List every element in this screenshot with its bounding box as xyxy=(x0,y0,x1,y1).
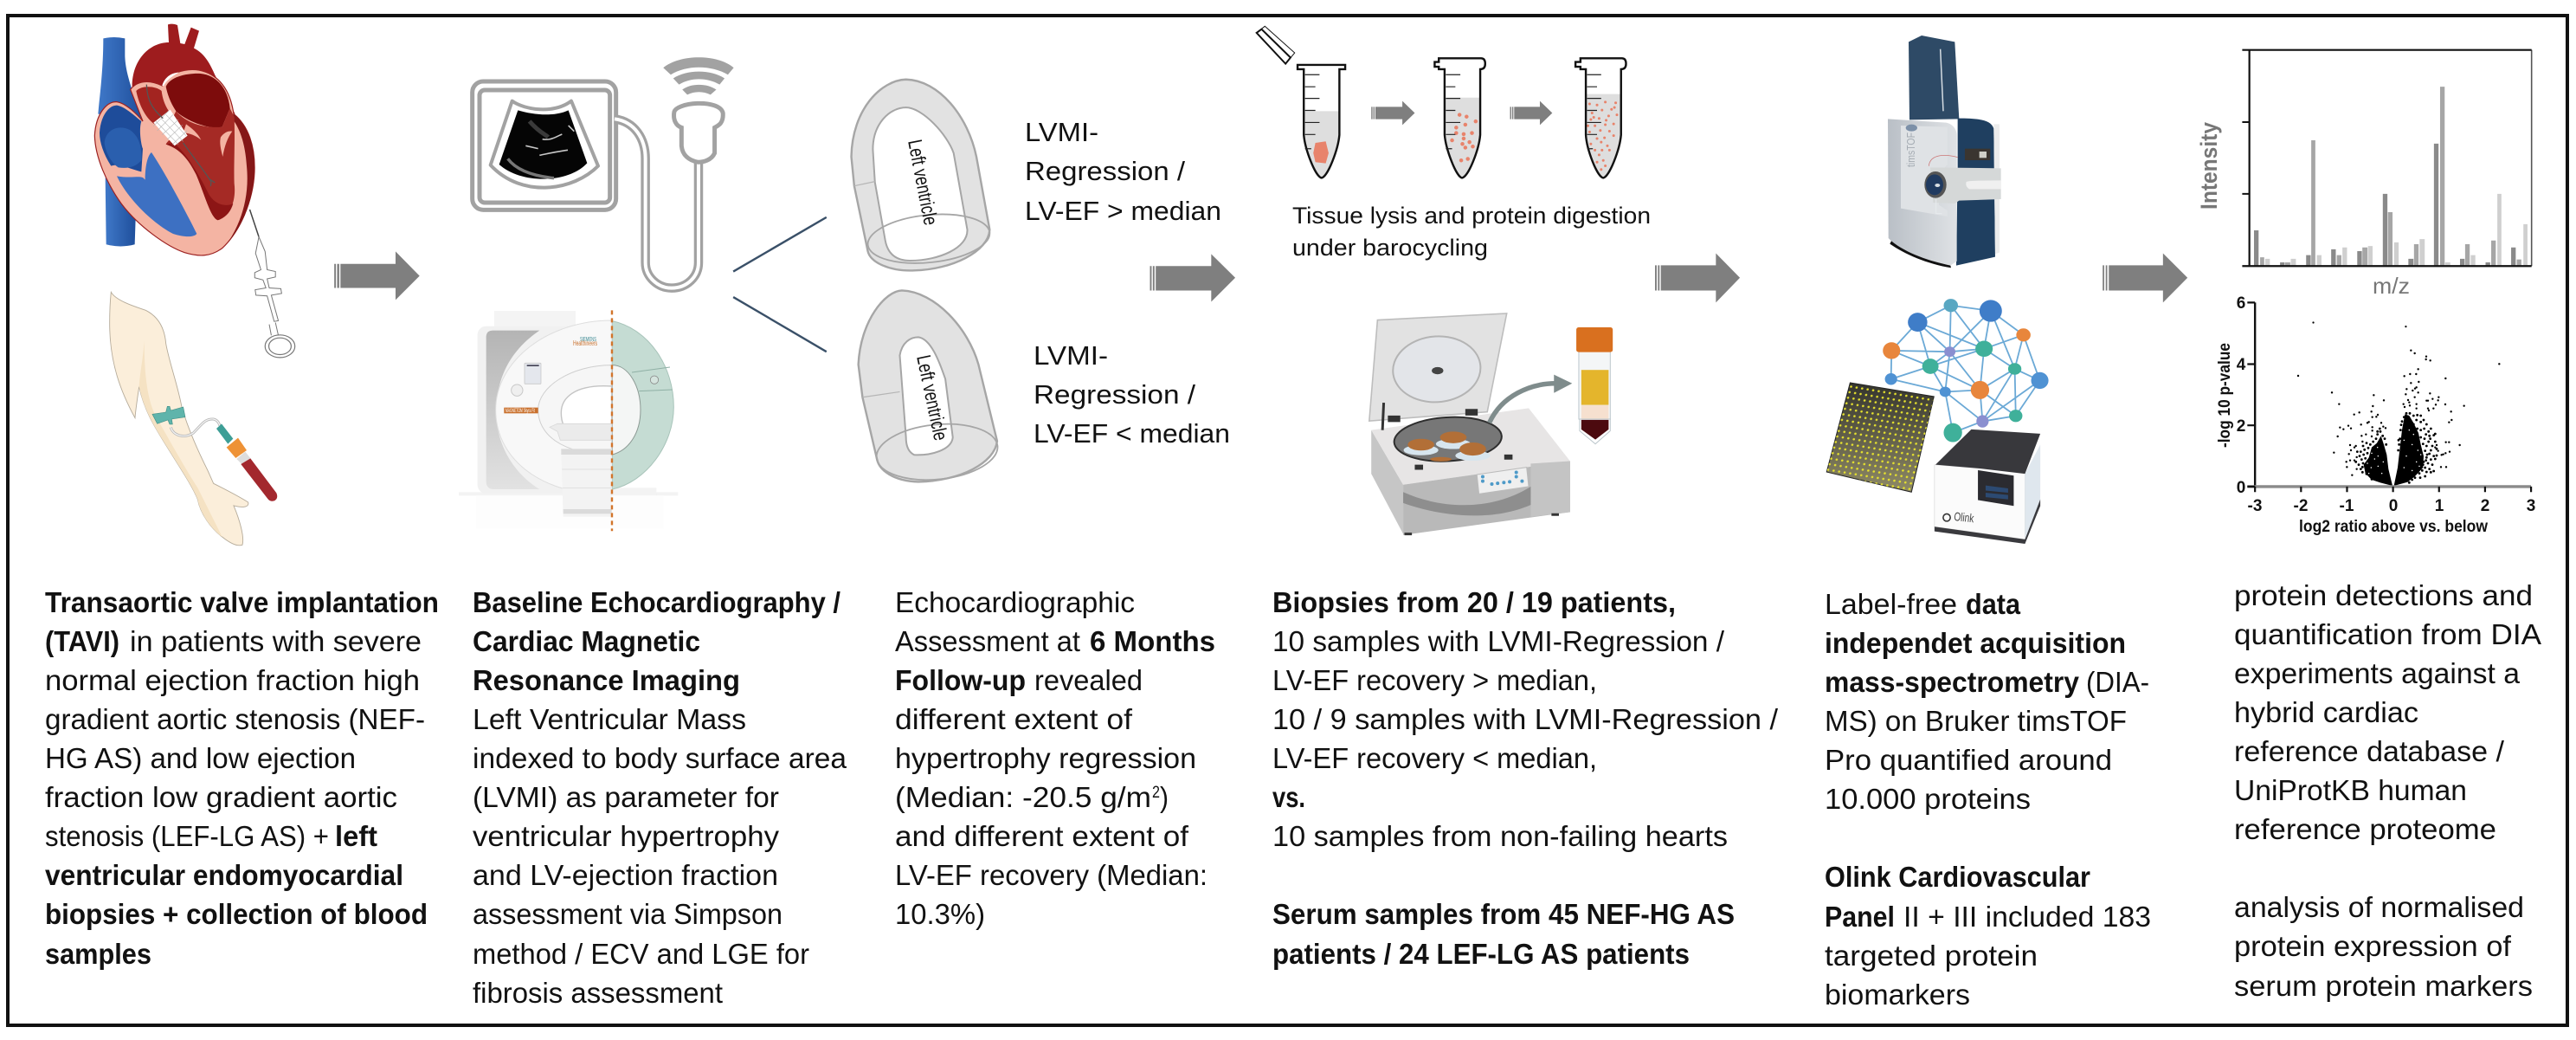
text block: follow-up: ) xyxy=(1160,781,1169,813)
icon: heart with valve implant xyxy=(94,24,254,255)
text block: mass spectrometry and Olink xyxy=(1825,588,2151,1011)
label: LVMI regression above median: Regression / xyxy=(1025,156,1185,186)
text block: TAVI: Transaortic valve implantation xyxy=(45,586,439,618)
label: LVMI regression above median: LV-EF > median xyxy=(1025,196,1221,226)
text block: mass spectrometry and Olink: Panel xyxy=(1825,901,1895,933)
icon: left ventricle, more regression xyxy=(852,80,993,270)
label: left ventricle lower: Left ventricle xyxy=(912,353,952,442)
text block: TAVI: stenosis (LEF-LG AS) + xyxy=(45,820,329,852)
text block: baseline imaging: and LV-ejection fraction xyxy=(473,859,778,891)
x tick labels xyxy=(2248,497,2535,515)
text block: samples: 10 samples from non-failing hearts xyxy=(1272,820,1728,852)
icon: tissue lysis tubes xyxy=(1257,26,1626,178)
icon: left ventricle, less regression xyxy=(859,290,1001,486)
text block: baseline imaging: Cardiac Magnetic xyxy=(473,625,700,657)
text block: data analysis: protein detections and xyxy=(2234,579,2533,611)
axis label: m/z: m/z xyxy=(2373,273,2410,299)
icon: ultrasound probe xyxy=(663,57,734,162)
text block: follow-up: Assessment at xyxy=(895,625,1080,657)
text block: data analysis: serum protein markers xyxy=(2234,970,2533,1002)
label: tissue lysis xyxy=(1292,203,1651,261)
x tick labels: 3 xyxy=(2527,497,2535,515)
text block: follow-up: 10.3%) xyxy=(895,898,985,930)
text block: mass spectrometry and Olink: mass-spectrometry xyxy=(1825,666,2080,698)
text block: follow-up: different extent of xyxy=(895,703,1133,735)
x axis label: log2 ratio above vs. below xyxy=(2299,518,2488,536)
text block: mass spectrometry and Olink: Olink Cardiovascular xyxy=(1825,861,2090,893)
label: LVMI regression below median xyxy=(1034,340,1230,449)
icon: echocardiography device xyxy=(473,81,699,288)
text block: baseline imaging: Left Ventricular Mass xyxy=(473,703,746,735)
text block: mass spectrometry and Olink: Pro quantified around xyxy=(1825,744,2112,776)
label: Olink: Olink xyxy=(1954,509,1975,525)
text block: data analysis: quantification from DIA xyxy=(2234,618,2541,650)
label: MRI brand: SIEMENS xyxy=(580,337,596,343)
text block: TAVI: in patients with severe xyxy=(130,625,422,657)
text block: samples: patients / 24 LEF-LG AS patients xyxy=(1272,938,1690,970)
text block: data analysis xyxy=(2234,579,2541,1002)
text block: mass spectrometry and Olink: 10.000 proteins xyxy=(1825,783,2031,815)
text block: data analysis: analysis of normalised xyxy=(2234,891,2524,923)
text block: baseline imaging: method / ECV and LGE for xyxy=(473,938,809,970)
text block: TAVI: gradient aortic stenosis (NEF- xyxy=(45,703,425,735)
text block: mass spectrometry and Olink: II + III included 183 xyxy=(1903,901,2151,933)
label: LVMI regression below median: Regression / xyxy=(1034,379,1195,410)
text block: follow-up: 6 Months xyxy=(1090,625,1215,657)
text block: TAVI xyxy=(45,586,439,970)
chart: volcano plot xyxy=(2216,294,2535,536)
text block: TAVI: fraction low gradient aortic xyxy=(45,781,397,813)
branching lines to left ventricle groups xyxy=(733,217,827,352)
text block: follow-up: (Median: -20.5 g/m xyxy=(895,781,1151,813)
text block: baseline imaging: Resonance Imaging xyxy=(473,664,740,696)
text block: data analysis: reference database / xyxy=(2234,735,2505,767)
label: MRI brand: MAGNETOM Skyra Fit xyxy=(506,409,535,414)
text block: baseline imaging: ventricular hypertrophy xyxy=(473,820,780,852)
text block: follow-up: revealed xyxy=(1034,664,1143,696)
text block: baseline imaging: Baseline Echocardiography / xyxy=(473,586,840,618)
text block: data analysis: reference proteome xyxy=(2234,813,2496,845)
label: timsTOF: timsTOF xyxy=(1904,132,1917,167)
text block: samples: LV-EF recovery < median, xyxy=(1272,742,1597,774)
text block: mass spectrometry and Olink: targeted protein xyxy=(1825,940,2038,972)
y tick labels xyxy=(2237,294,2246,497)
x tick labels: -1 xyxy=(2340,497,2354,515)
text block: TAVI: samples xyxy=(45,938,151,970)
text block: baseline imaging xyxy=(473,586,847,1009)
icon: protein network xyxy=(1883,299,2049,442)
text block: mass spectrometry and Olink: data xyxy=(1966,588,2021,620)
text block: data analysis: UniProtKB human xyxy=(2234,774,2467,806)
icon: Olink instrument xyxy=(1935,430,2040,544)
y axis label: -log 10 p-value xyxy=(2216,343,2234,448)
text block: TAVI: normal ejection fraction high xyxy=(45,664,420,696)
text block: TAVI: HG AS) and low ejection xyxy=(45,742,356,774)
label: MRI brand: Healthineers xyxy=(573,339,597,347)
label: MRI brand xyxy=(506,337,597,414)
text block: follow-up: Echocardiographic xyxy=(895,586,1135,618)
axis label: Intensity: Intensity xyxy=(2196,122,2222,210)
text block: samples: vs. xyxy=(1272,781,1305,813)
text block: TAVI: biopsies + collection of blood xyxy=(45,898,428,930)
text block: follow-up: LV-EF recovery (Median: xyxy=(895,859,1208,891)
text block: samples: LV-EF recovery > median, xyxy=(1272,664,1597,696)
label: tissue lysis: under barocycling xyxy=(1292,235,1488,261)
x tick labels: -2 xyxy=(2294,497,2308,515)
text block: data analysis: hybrid cardiac xyxy=(2234,696,2418,728)
x tick labels: 2 xyxy=(2481,497,2489,515)
text block: mass spectrometry and Olink: independet acquisition xyxy=(1825,627,2126,659)
text block: baseline imaging: (LVMI) as parameter for xyxy=(473,781,779,813)
label: LVMI regression above median: LVMI- xyxy=(1025,117,1098,147)
text block: TAVI: left xyxy=(335,820,377,852)
text block: mass spectrometry and Olink: Label-free xyxy=(1825,588,1957,620)
arrow 3 xyxy=(1655,254,1740,302)
icon: centrifuge and serum tube xyxy=(1369,313,1613,535)
text block: follow-up: Follow-up xyxy=(895,664,1026,696)
y tick labels: 4 xyxy=(2237,356,2246,374)
text block: samples xyxy=(1272,586,1779,970)
text block: mass spectrometry and Olink: MS) on Bruker timsTOF xyxy=(1825,705,2127,737)
icon: timsTOF mass spectrometer xyxy=(1888,36,2001,268)
text block: mass spectrometry and Olink: (DIA- xyxy=(2086,666,2149,698)
text block: follow-up xyxy=(895,586,1215,930)
text block: follow-up: 2 xyxy=(1152,784,1160,802)
text block: follow-up: and different extent of xyxy=(895,820,1189,852)
text block: samples: Biopsies from 20 / 19 patients, xyxy=(1272,586,1676,618)
text block: follow-up: hypertrophy regression xyxy=(895,742,1196,774)
text block: data analysis: experiments against a xyxy=(2234,657,2521,689)
icon: MRI scanner xyxy=(459,310,678,531)
arrow 1 xyxy=(334,251,420,300)
x tick labels: 1 xyxy=(2435,497,2444,515)
label: tissue lysis: Tissue lysis and protein digestion xyxy=(1292,203,1651,229)
y tick labels: 2 xyxy=(2237,417,2245,436)
text block: samples: 10 samples with LVMI-Regression / xyxy=(1272,625,1725,657)
x tick labels: -3 xyxy=(2248,497,2262,515)
text block: baseline imaging: fibrosis assessment xyxy=(473,977,723,1009)
icon: bioptome xyxy=(250,210,295,358)
text block: samples: 10 / 9 samples with LVMI-Regression / xyxy=(1272,703,1779,735)
label: left ventricle upper: Left ventricle xyxy=(904,138,943,227)
text block: data analysis: protein expression of xyxy=(2234,930,2512,962)
text block: mass spectrometry and Olink: biomarkers xyxy=(1825,979,1970,1011)
chart: mass spectrum bars xyxy=(2242,50,2532,266)
x tick labels: 0 xyxy=(2389,497,2398,515)
y tick labels: 6 xyxy=(2237,294,2245,313)
arrow 4 xyxy=(2103,254,2187,302)
text block: baseline imaging: indexed to body surface area xyxy=(473,742,847,774)
label: LVMI regression below median: LV-EF < median xyxy=(1034,418,1230,449)
icon: assay plate xyxy=(1826,383,1934,492)
label: LVMI regression below median: LVMI- xyxy=(1034,340,1108,371)
y tick labels: 0 xyxy=(2237,479,2245,497)
arrow 2 xyxy=(1150,254,1235,302)
text block: TAVI: ventricular endomyocardial xyxy=(45,859,403,891)
icon: arm with blood collection tube xyxy=(110,292,277,546)
text block: baseline imaging: assessment via Simpson xyxy=(473,898,782,930)
label: LVMI regression above median xyxy=(1025,117,1221,226)
text block: samples: Serum samples from 45 NEF-HG AS xyxy=(1272,898,1735,930)
text block: TAVI: (TAVI) xyxy=(45,625,119,657)
